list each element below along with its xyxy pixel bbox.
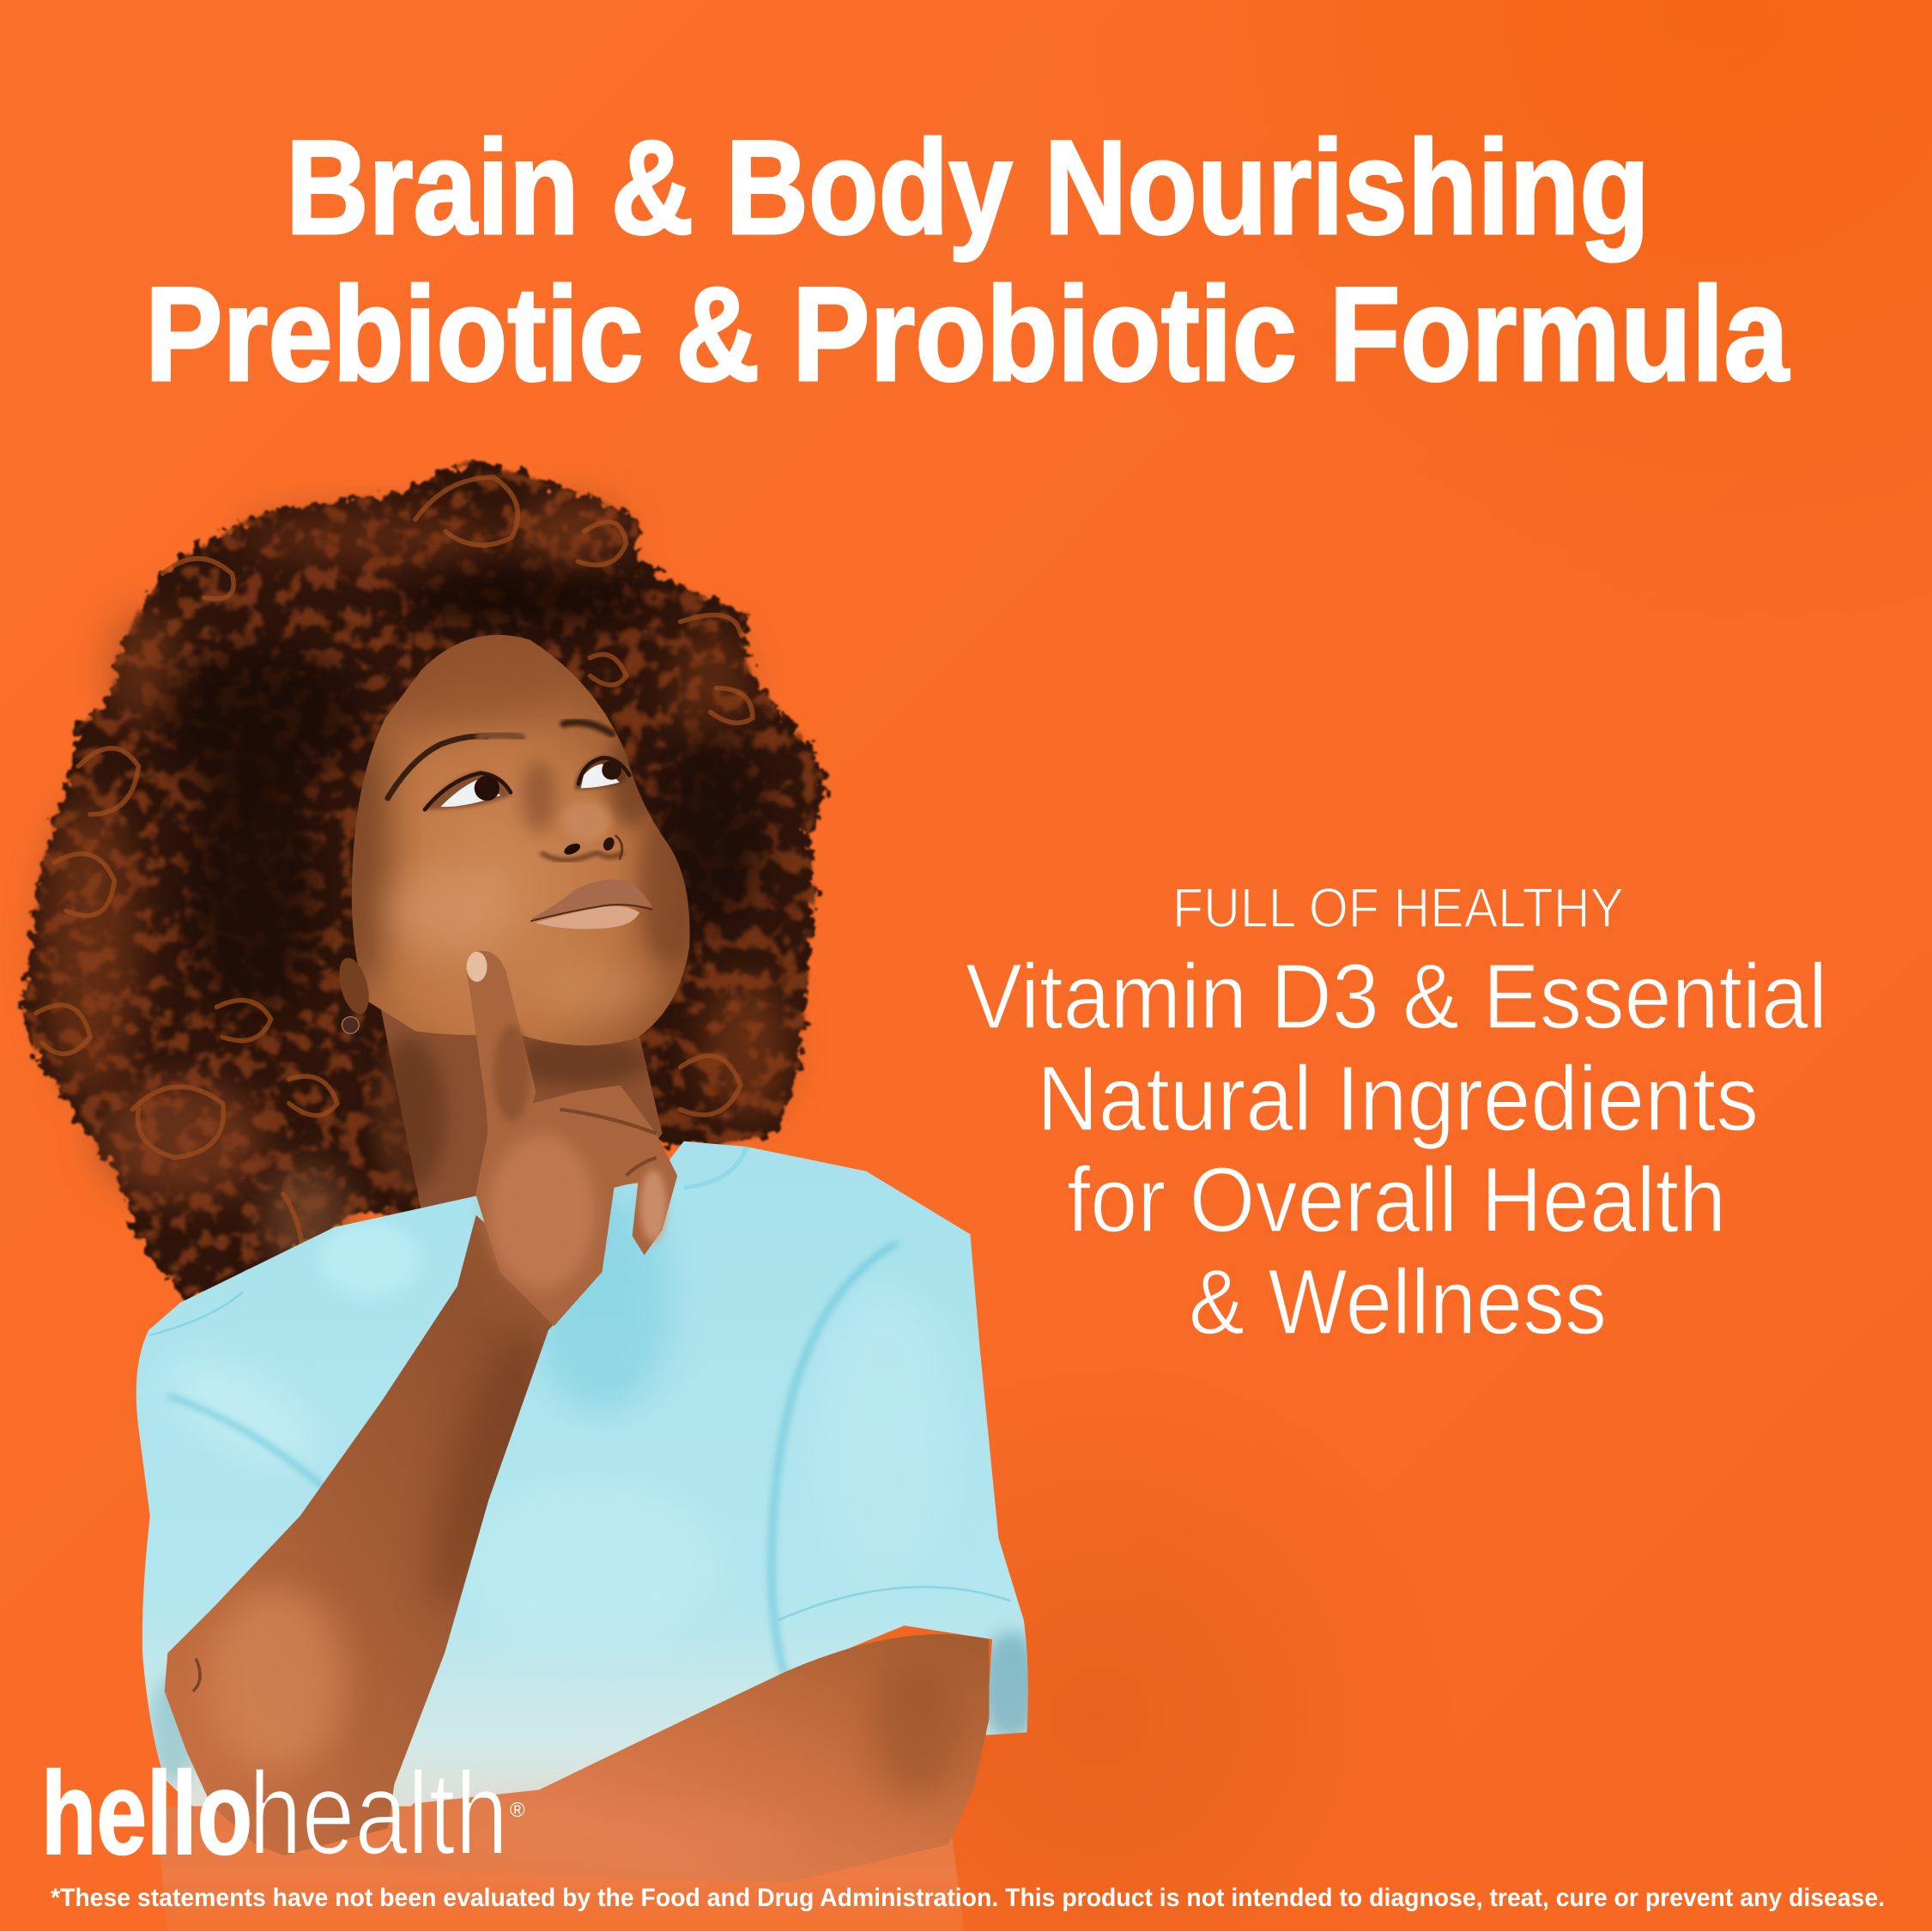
benefits text block: & Wellness bbox=[1189, 1250, 1607, 1353]
ear and earring bbox=[334, 954, 374, 1033]
hand and pointing finger bbox=[467, 951, 677, 1326]
benefits text block bbox=[966, 876, 1827, 1353]
logo: hellohealth: health bbox=[249, 1748, 508, 1880]
hair curls bbox=[36, 477, 753, 1272]
raised forearm bbox=[165, 1215, 573, 1855]
benefits text block: for Overall Health bbox=[1067, 1147, 1726, 1251]
logo: hellohealth: ® bbox=[510, 1799, 525, 1822]
crossed arm and torso fade bbox=[155, 1634, 989, 1931]
facial features bbox=[388, 723, 652, 929]
eyebrows bbox=[388, 723, 612, 798]
benefits text block: FULL OF HEALTHY bbox=[1172, 876, 1624, 939]
lips bbox=[530, 880, 652, 929]
title bbox=[145, 113, 1790, 409]
nose bbox=[541, 801, 624, 860]
t-shirt bbox=[136, 1141, 1043, 1812]
logo: hellohealth bbox=[41, 1748, 525, 1880]
title: Brain & Body Nourishing bbox=[286, 113, 1650, 263]
benefits text block: Natural Ingredients bbox=[1037, 1046, 1759, 1150]
illustration: girl thinking bbox=[21, 459, 1043, 1931]
benefits text block: Vitamin D3 & Essential bbox=[966, 944, 1827, 1048]
logo: hellohealth: hello bbox=[41, 1748, 252, 1880]
disclaimer: *These statements have not been evaluated by the Food and Drug Administration. This product is not intended to diagnose, treat, cure or prevent any disease. bbox=[51, 1884, 1885, 1912]
neck bbox=[373, 1001, 663, 1212]
hair bbox=[21, 459, 828, 1302]
face bbox=[331, 635, 699, 1045]
right eye bbox=[575, 755, 629, 790]
left eye bbox=[423, 771, 511, 809]
